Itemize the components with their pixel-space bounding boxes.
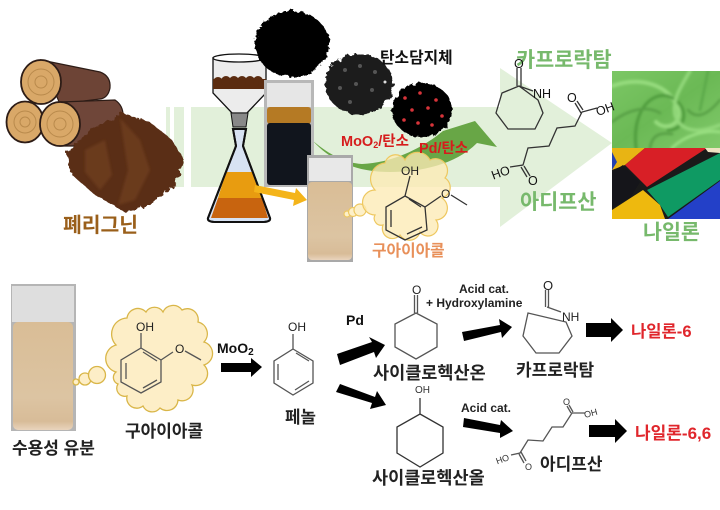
label: cyclohexanol: 사이클로헥산올 (372, 468, 485, 488)
icon: filter funnel and flask (208, 54, 270, 222)
icon: porous carbon support (325, 54, 393, 114)
label: acid cat and hydroxylamine: Acid cat. (459, 282, 509, 296)
label: MoO2: MoO (217, 340, 248, 356)
chemical structure: adipic acid (lower) (494, 397, 599, 472)
label: lignin: 폐리그닌 (63, 214, 138, 237)
chemical structure: adipic acid (upper): OH (594, 99, 616, 119)
label: carbon support: 탄소담지체 (380, 49, 453, 67)
chemical structure: cyclohexanone (395, 283, 437, 359)
label: acid cat and hydroxylamine (426, 282, 523, 310)
icon: wooden logs (6, 60, 123, 146)
chemical structure: caprolactam (upper): NH (533, 87, 551, 101)
chemical structure: guaiacol (upper): O (441, 187, 450, 201)
photo: dark carbon slurry vial (264, 80, 314, 187)
chemical structure: caprolactam (upper): O (514, 57, 524, 71)
chemical structure: phenol (274, 320, 313, 395)
label: caprolactam: 카프로락탐 (516, 361, 595, 380)
icon: lignin powder pile (66, 113, 184, 212)
arrow: adipic acid to nylon-6,6 (589, 419, 627, 443)
label: nylon-6: 나일론-6 (631, 322, 692, 341)
chemical structure: adipic acid (upper) (489, 91, 616, 188)
chemical structure: phenol: OH (288, 320, 306, 334)
chemical structure: adipic acid (lower): O (563, 397, 570, 407)
chemical structure: adipic acid (upper): O (567, 91, 577, 105)
arrow: phenol to cyclohexanone (337, 337, 385, 365)
chemical structure: adipic acid (upper): O (528, 174, 538, 188)
arrow: yellow extraction arrow (254, 185, 307, 206)
icon: metal loaded carbon (392, 83, 452, 137)
chemical structure: guaiacol (upper): OH (401, 164, 419, 178)
arrow: cyclohexanone to caprolactam (462, 319, 512, 341)
arrow: cyclohexanol to adipic acid (463, 418, 513, 438)
chemical structure: caprolactam (lower): O (543, 278, 553, 293)
label: adipic acid green: 아디프산 (520, 191, 597, 214)
arrow: phenol to cyclohexanol (336, 384, 386, 409)
label: Pd: Pd (346, 312, 364, 328)
chemical structure: guaiacol (lower): OH (136, 320, 154, 334)
chemical structure: adipic acid (upper): HO (489, 163, 512, 183)
chemical structure: adipic acid (lower): OH (583, 407, 599, 420)
panel: upper process overview (6, 11, 720, 262)
label: caprolactam green: 카프로락탐 (516, 49, 612, 72)
label: guaiacol: 구아이아콜 (125, 422, 203, 441)
label: phenol: 페놀 (285, 408, 316, 427)
chemical structure: guaiacol (upper) (386, 164, 467, 240)
chemical structure: guaiacol (lower) (121, 320, 201, 393)
chemical structure: adipic acid (lower): O (525, 462, 532, 472)
chemical structure: cyclohexanol: OH (415, 385, 430, 396)
label: nylon green: 나일론 (643, 221, 700, 244)
chemical structure: caprolactam (lower) (523, 278, 579, 353)
label: guaiacol orange: 구아이아콜 (372, 242, 445, 260)
panel: lower reaction pathway (11, 278, 711, 488)
photo: water-soluble oil vial (11, 284, 76, 431)
label: MoO2 on carbon: MoO (341, 134, 373, 150)
label: Pd on carbon: Pd/탄소 (419, 140, 468, 157)
arrow: green curved arrow (313, 121, 497, 172)
chemical structure: adipic acid (lower): HO (494, 452, 511, 466)
photo: green nylon fabric (612, 71, 720, 148)
label: acid cat: Acid cat. (461, 401, 511, 415)
callout: guaiacol thought cloud (344, 152, 450, 240)
arrow: caprolactam to nylon-6 (586, 318, 623, 342)
chemical structure: caprolactam (upper) (496, 57, 551, 129)
arrow: MoO2 step (221, 358, 262, 377)
chemical structure: cyclohexanol (397, 385, 443, 467)
label: MoO2 on carbon: 2 (373, 140, 378, 150)
icon: carbon particle (255, 11, 329, 77)
label: nylon-6,6: 나일론-6,6 (635, 424, 711, 443)
chemical structure: cyclohexanone: O (412, 283, 421, 297)
photo: colored nylon thread spools (612, 148, 720, 219)
label: MoO2 on carbon: /탄소 (378, 133, 409, 150)
label: adipic acid: 아디프산 (540, 455, 603, 474)
background green process arrow (166, 68, 612, 227)
photo: beige liquid vial (307, 155, 353, 262)
chemical structure: caprolactam (lower): NH (562, 310, 579, 324)
label: water-soluble oil: 수용성 유분 (12, 439, 95, 458)
chemical structure: guaiacol (lower): O (175, 342, 184, 356)
label: acid cat and hydroxylamine: + Hydroxylamine (426, 296, 523, 310)
label: MoO2: 2 (248, 347, 254, 358)
callout: guaiacol thought cloud lower (73, 305, 213, 412)
label: cyclohexanone: 사이클로헥산온 (373, 363, 486, 383)
